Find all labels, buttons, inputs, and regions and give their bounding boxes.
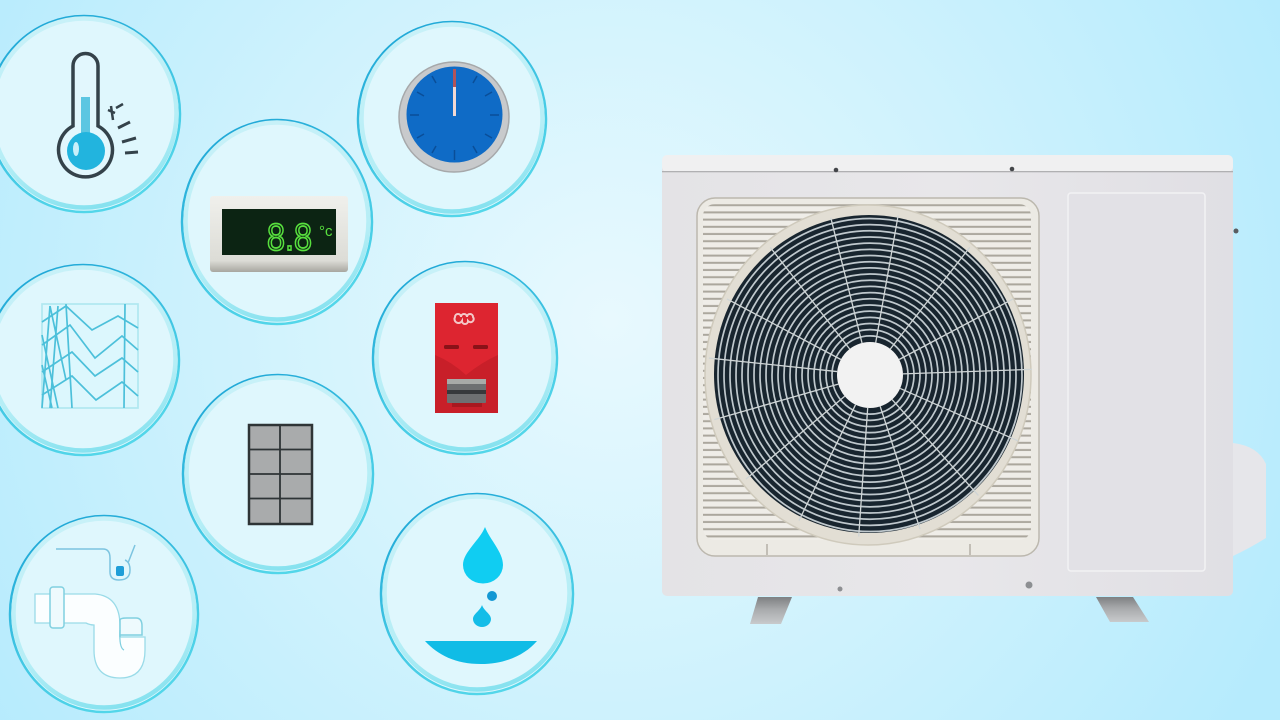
bottom screws — [838, 582, 1032, 592]
fan grille frame — [697, 198, 1039, 556]
icon: zigzag filter — [42, 304, 138, 408]
panel: digital display bubble — [182, 120, 372, 324]
icon: thermometer — [58, 53, 138, 177]
panel: gauge bubble — [358, 22, 546, 216]
panel: electrical switch bubble — [373, 262, 557, 454]
icon: gray grid filter — [249, 425, 312, 524]
icon: digital thermostat display: 8.8 — [267, 217, 312, 259]
icon: digital thermostat display: °c — [319, 223, 333, 240]
side cover bump — [1233, 443, 1266, 556]
service panel — [1068, 193, 1205, 571]
unit body — [662, 156, 1233, 596]
icon: drain pipe — [35, 545, 145, 678]
icon: digital thermostat display — [210, 196, 348, 272]
foot: left — [750, 597, 792, 624]
outdoor air conditioner unit — [662, 155, 1266, 624]
panel: water leak bubble — [381, 494, 573, 694]
top cap — [662, 155, 1233, 172]
panel: coil filter bubble — [0, 265, 179, 455]
panel: thermometer bubble — [0, 16, 180, 212]
panel: drain pipe bubble — [10, 516, 198, 712]
fan hub — [837, 342, 903, 408]
foot: right — [1096, 597, 1149, 622]
icon: water drops and basin — [425, 527, 537, 664]
icon: blue gauge — [399, 62, 509, 172]
panel: air filter grid bubble — [183, 375, 373, 573]
icon: red disconnect box — [435, 303, 498, 413]
screw on side — [1234, 228, 1238, 234]
fan guard — [705, 205, 1032, 545]
